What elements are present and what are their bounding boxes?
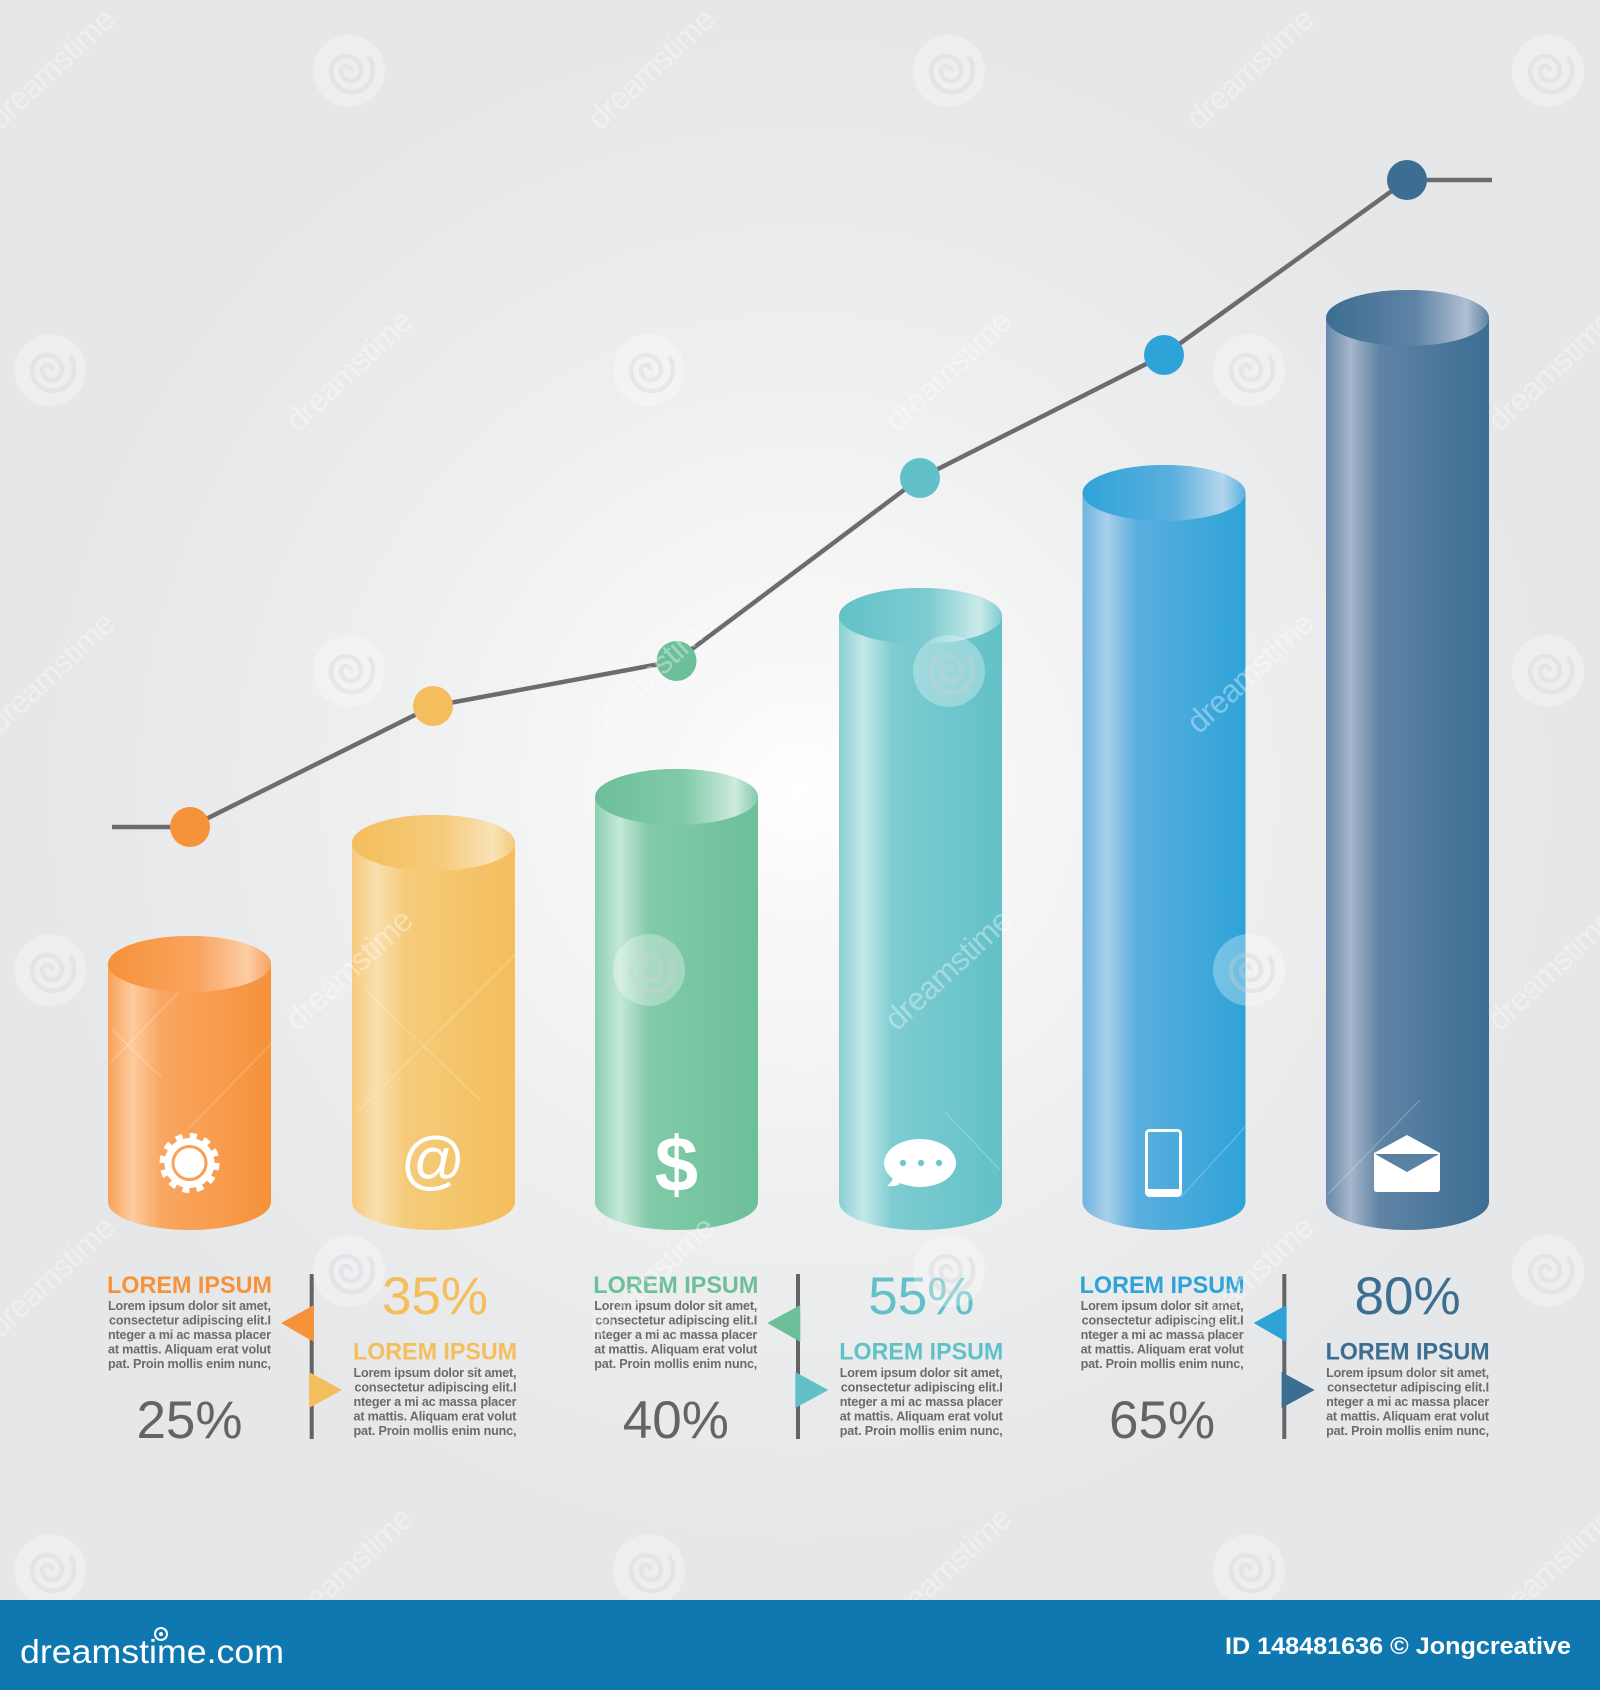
watermark overlay: dreamstime [580, 1, 722, 136]
legend: 40% and 55% [593, 1267, 1004, 1450]
text block: 25%: consectetur adipiscing elit.I [109, 1314, 271, 1328]
cylinder 80% navy [1326, 290, 1489, 1230]
text block: 55%: Lorem ipsum dolor sit amet, [840, 1366, 1003, 1380]
text block: 80%: consectetur adipiscing elit.I [1327, 1380, 1489, 1394]
text block: 80% [1326, 1267, 1490, 1438]
text block: 40%: Lorem ipsum dolor sit amet, [594, 1299, 757, 1313]
text block: 25%: nteger a mi ac massa placer [108, 1328, 271, 1342]
text block: 25%: 25% [136, 1391, 243, 1450]
text block: 65%: LOREM IPSUM [1080, 1272, 1245, 1299]
watermark overlay: dreamstime [877, 303, 1019, 438]
text block: 65% [1080, 1272, 1245, 1450]
text block: 25%: Lorem ipsum dolor sit amet, [108, 1299, 271, 1313]
text block: 80%: Lorem ipsum dolor sit amet, [1326, 1366, 1489, 1380]
watermark overlay: dreamstime [877, 1500, 1019, 1635]
text block: 65%: Lorem ipsum dolor sit amet, [1081, 1299, 1244, 1313]
watermark overlay: dreamstime [278, 902, 420, 1037]
text block: 55%: nteger a mi ac massa placer [840, 1395, 1003, 1409]
cylinder 25% orange [108, 936, 271, 1230]
text block: 35%: LOREM IPSUM [353, 1338, 517, 1366]
text block: 80%: nteger a mi ac massa placer [1326, 1395, 1489, 1409]
text block: 35% [353, 1267, 517, 1438]
text block: 80%: at mattis. Aliquam erat volut [1326, 1410, 1490, 1424]
trend line with markers [112, 160, 1492, 847]
text block: 40%: LOREM IPSUM [593, 1272, 758, 1299]
text block: 40%: at mattis. Aliquam erat volut [594, 1342, 758, 1356]
icon: at sign: @ [401, 1124, 465, 1196]
text block: 65%: at mattis. Aliquam erat volut [1081, 1342, 1244, 1356]
text block: 25%: pat. Proin mollis enim nunc, [108, 1357, 271, 1371]
divider and flags [1254, 1274, 1315, 1439]
footer logo: dreamstime.com [20, 1633, 284, 1670]
text block: 35%: 35% [382, 1267, 488, 1326]
icon: gear [162, 1136, 216, 1190]
cylinder 40% green [595, 769, 758, 1230]
text block: 65%: 65% [1109, 1391, 1215, 1450]
text block: 55%: at mattis. Aliquam erat volut [840, 1410, 1004, 1424]
text block: 25%: at mattis. Aliquam erat volut [108, 1342, 272, 1356]
text block: 65%: nteger a mi ac massa placer [1081, 1328, 1244, 1342]
legend: 65% and 80% [1080, 1267, 1490, 1450]
text block: 35%: Lorem ipsum dolor sit amet, [354, 1366, 516, 1380]
text block: 55% [839, 1267, 1004, 1438]
footer banner [0, 1600, 1600, 1690]
text block: 35%: consectetur adipiscing elit.I [354, 1380, 516, 1394]
text block: 65%: consectetur adipiscing elit.I [1082, 1314, 1244, 1328]
icon: speech bubble [884, 1139, 956, 1187]
text block: 55%: consectetur adipiscing elit.I [841, 1380, 1003, 1394]
text block: 80%: 80% [1355, 1267, 1461, 1326]
watermark overlay: dreamstime [1179, 1209, 1321, 1344]
icon: dollar: $ [655, 1120, 698, 1208]
cylinder 35% yellow [352, 815, 515, 1230]
text block: 65%: pat. Proin mollis enim nunc, [1081, 1357, 1244, 1371]
text block: 80%: pat. Proin mollis enim nunc, [1326, 1424, 1489, 1438]
text block: 35%: at mattis. Aliquam erat volut [354, 1410, 517, 1424]
text block: 25%: LOREM IPSUM [107, 1272, 272, 1299]
bar chart: cylinders [108, 290, 1489, 1230]
watermark overlay: dreamstime [580, 1209, 722, 1344]
text block: 25% [107, 1272, 272, 1450]
text block: 40%: pat. Proin mollis enim nunc, [594, 1357, 757, 1371]
divider and flags [767, 1274, 828, 1439]
divider and flags [281, 1274, 342, 1439]
cylinder 65% blue [1082, 465, 1246, 1230]
text block: 40%: consectetur adipiscing elit.I [595, 1314, 757, 1328]
text block: 55%: 55% [868, 1267, 974, 1326]
text block: 40%: 40% [623, 1391, 729, 1450]
watermark overlay: dreamstime [580, 605, 722, 740]
legend: 25% and 35% [107, 1267, 517, 1450]
watermark overlay: dreamstime [1179, 1, 1321, 136]
text block: 35%: pat. Proin mollis enim nunc, [354, 1424, 516, 1438]
text block: 80%: LOREM IPSUM [1326, 1338, 1490, 1366]
footer credit: ID 148481636 © Jongcreative [1225, 1633, 1571, 1660]
text block: 55%: LOREM IPSUM [839, 1338, 1003, 1366]
icon: smartphone [1146, 1130, 1180, 1196]
cylinder 55% teal [839, 588, 1002, 1230]
watermark overlay: dreamstime [278, 1500, 420, 1635]
text block: 35%: nteger a mi ac massa placer [354, 1395, 517, 1409]
watermark overlay: dreamstime [278, 303, 420, 438]
text block: 40% [593, 1272, 758, 1450]
icon: envelope [1374, 1135, 1440, 1192]
text block: 40%: nteger a mi ac massa placer [594, 1328, 757, 1342]
watermark overlay: dreamstime [1179, 605, 1321, 740]
text block: 55%: pat. Proin mollis enim nunc, [840, 1424, 1003, 1438]
watermark overlay: dreamstime [877, 902, 1019, 1037]
